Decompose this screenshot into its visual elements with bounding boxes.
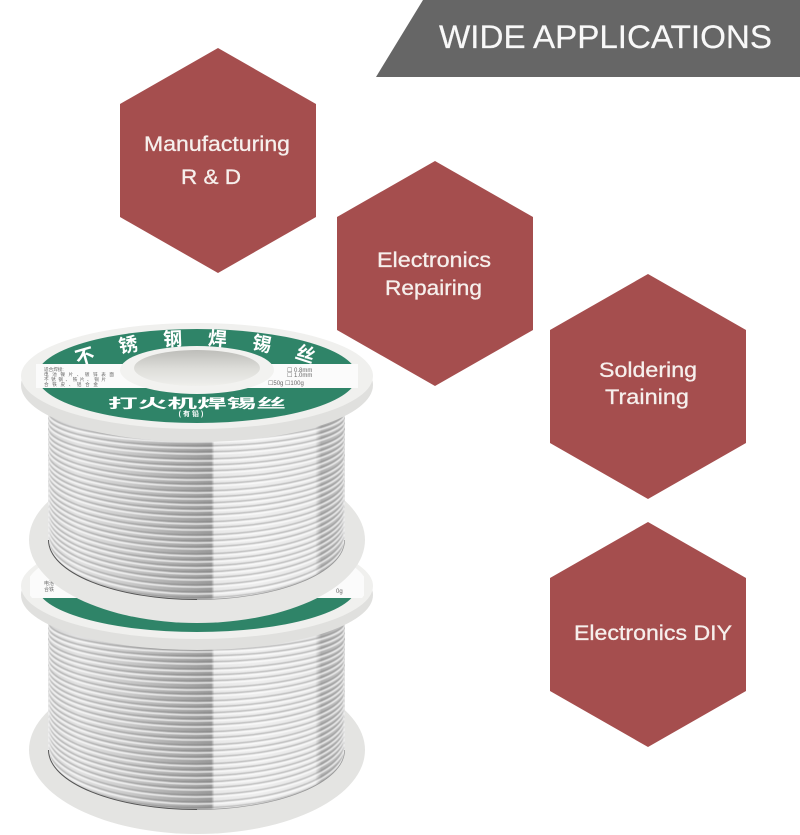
hexagon: Manufacturing R & D: Manufacturing xyxy=(144,133,290,156)
hexagon: Electronics Repairing xyxy=(337,161,533,386)
spool label subtitle: 打火机焊锡丝 xyxy=(108,396,286,411)
hexagon: Soldering Training: Training xyxy=(605,386,689,409)
lower spool wire coil xyxy=(48,610,345,810)
upper spool top flange xyxy=(21,323,373,442)
spool label size options xyxy=(268,367,312,387)
spool centre hole xyxy=(120,346,274,394)
lower spool top flange xyxy=(21,564,373,650)
upper spool top flange: 不锈钢焊锡丝 xyxy=(74,329,316,364)
spool label size options: ☐ 0.8mm xyxy=(287,367,312,374)
lower spool partly hidden label text: 合铁 xyxy=(44,586,54,593)
spool label left notes xyxy=(44,366,114,388)
title banner xyxy=(376,0,800,77)
lower spool partly hidden label text xyxy=(44,580,343,595)
lower spool partly hidden label text: 电池 xyxy=(44,580,54,587)
spool label title xyxy=(72,345,326,368)
lower solder wire spool xyxy=(21,564,373,834)
hexagon: Soldering Training: Soldering xyxy=(599,359,697,382)
upper solder wire spool xyxy=(21,323,373,623)
upper spool wire coil xyxy=(48,400,345,600)
hexagon: Electronics DIY: Electronics DIY xyxy=(574,622,732,645)
hexagon: Manufacturing R & D: R & D xyxy=(181,166,241,189)
upper spool bottom flange xyxy=(29,457,365,623)
title banner: WIDE APPLICATIONS xyxy=(439,19,772,55)
spool label size options: ☐50g ☐100g xyxy=(268,380,304,387)
hexagon: Soldering Training xyxy=(550,274,746,499)
hexagon: Electronics DIY xyxy=(550,522,746,747)
spool label left notes: 适合焊接: xyxy=(44,366,64,373)
spool label left notes: 电池镍片、镀锌表面 xyxy=(44,371,114,378)
spool label size options: ☐ 1.0mm xyxy=(287,372,312,379)
lower spool partly hidden label text: 0g xyxy=(336,589,343,595)
hexagon: Electronics Repairing: Repairing xyxy=(385,277,482,300)
spool label left notes: 合铁皮、铝合金 xyxy=(44,381,98,388)
lower spool bottom flange xyxy=(29,666,365,834)
upper spool top flange: (有铅) xyxy=(179,409,205,418)
hexagon: Electronics Repairing: Electronics xyxy=(377,249,491,272)
hexagon: Manufacturing R & D xyxy=(120,48,316,273)
spool label left notes: 不锈钢、铁片、铜片 xyxy=(44,376,106,383)
